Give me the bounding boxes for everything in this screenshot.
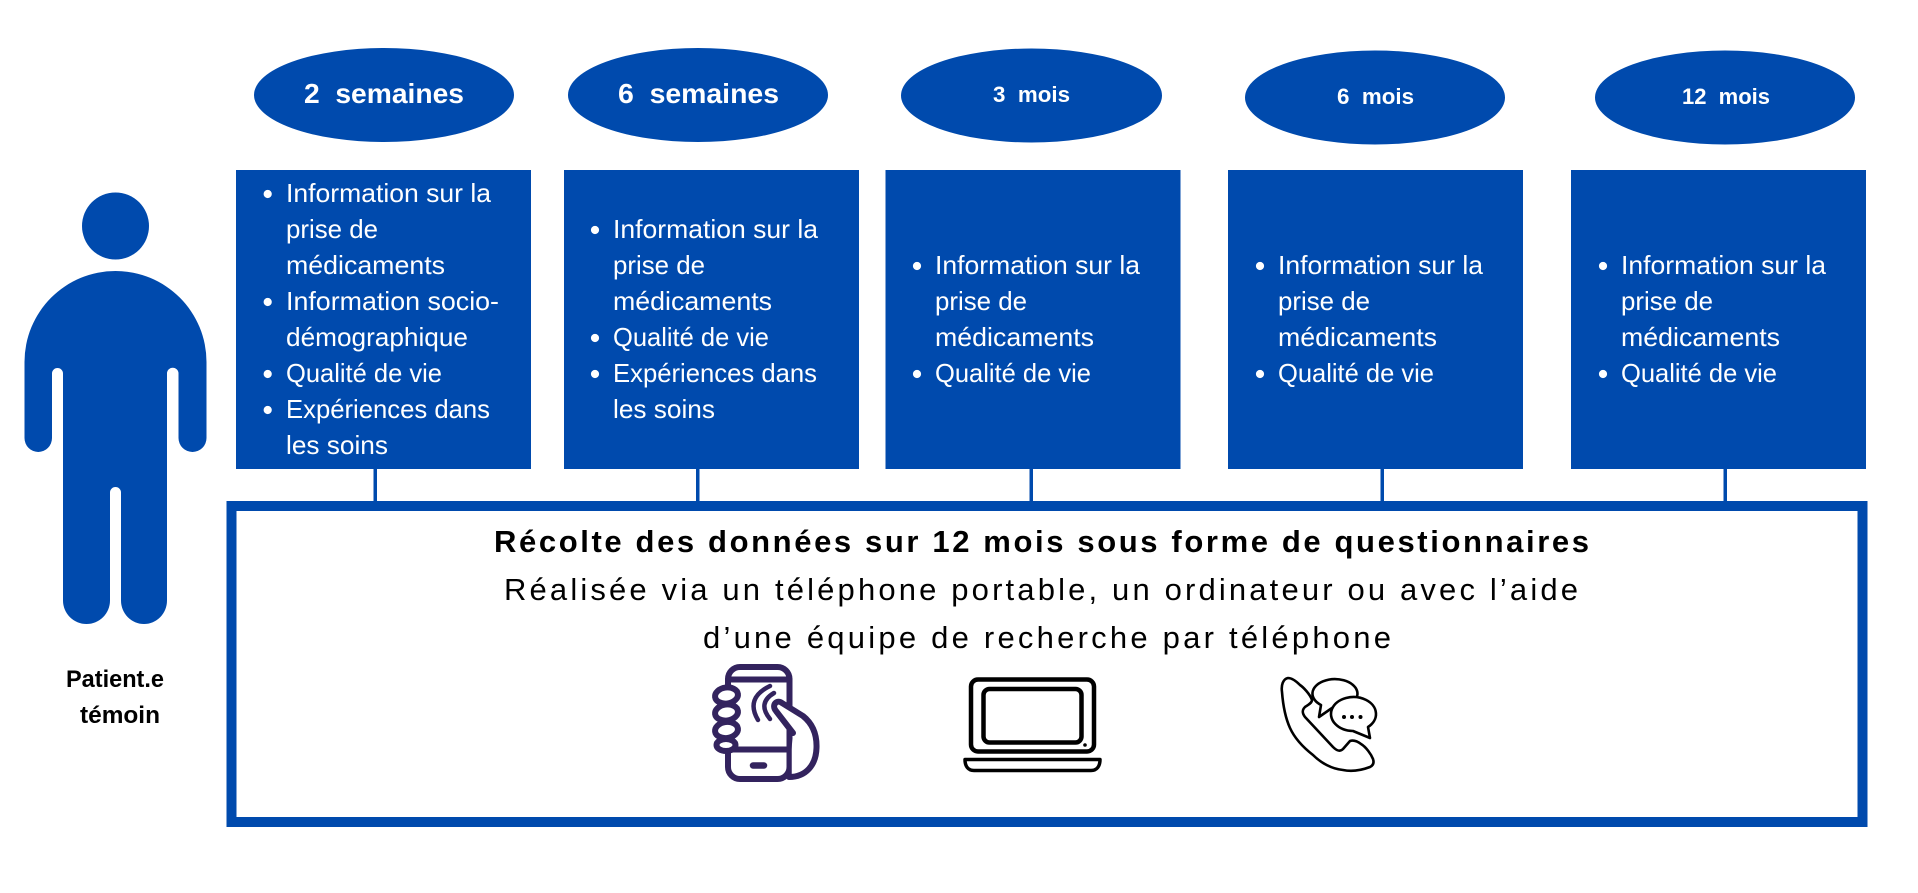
panel: contenu 6 semaines [564,170,859,469]
panel: contenu 3 mois: Qualité de vie [935,358,1091,388]
text: collection methods: d’une équipe de recherche par téléphone [703,620,1391,655]
panel: contenu 6 semaines: Qualité de vie [613,322,769,352]
label: patient: Patient.e [66,666,164,693]
panel: contenu 6 semaines: les soins [613,394,715,424]
panel: contenu 6 semaines: Information sur la [613,214,819,244]
connectors: panels to data collection frame [374,469,1727,502]
panel: data collection frame [232,506,1862,822]
panel: contenu 12 mois: médicaments [1621,322,1780,352]
icon: patient figure [24,192,206,624]
timepoint: 6 mois [1245,50,1505,144]
text: collection methods: Réalisée via un téléphone portable, un ordinateur ou avec l’aide [504,572,1578,607]
text: collection methods [504,572,1578,655]
panel: contenu 6 mois: prise de [1278,286,1370,316]
panel: contenu 12 mois: Qualité de vie [1621,358,1777,388]
timepoint: 12 mois [1595,50,1855,144]
panel: contenu 2 semaines: Expériences dans [286,394,490,424]
timepoint: 3 mois [901,48,1162,142]
timepoint: 12 mois: 12 mois [1682,84,1770,109]
panel: contenu 6 mois: Information sur la [1278,250,1484,280]
label: patient [66,666,164,729]
label: patient: témoin [80,702,160,729]
panel: contenu 6 semaines: Expériences dans [613,358,817,388]
panel: contenu 2 semaines: médicaments [286,250,445,280]
panel: contenu 3 mois: prise de [935,286,1027,316]
icon: smartphone in hand [714,667,817,779]
timepoint: 2 semaines: 2 semaines [304,78,464,109]
panel: contenu 2 semaines: démographique [286,322,468,352]
heading: data collection: Récolte des données sur 12 mois sous forme de questionnaires [494,524,1589,559]
panel: contenu 12 mois: prise de [1621,286,1713,316]
panel: contenu 6 semaines: médicaments [613,286,772,316]
timepoint: 6 semaines [568,48,828,142]
panel: contenu 2 semaines: Information socio- [286,286,499,316]
panel: contenu 3 mois: médicaments [935,322,1094,352]
panel: contenu 3 mois: Information sur la [935,250,1141,280]
panel: contenu 2 semaines [236,170,531,469]
panel: contenu 6 mois: médicaments [1278,322,1437,352]
icon: phone with speech bubbles [1282,678,1376,771]
panel: contenu 6 semaines: prise de [613,250,705,280]
timepoint: 2 semaines [254,48,514,142]
panel: contenu 2 semaines: prise de [286,214,378,244]
panel: contenu 6 mois: Qualité de vie [1278,358,1434,388]
panel: contenu 3 mois [886,170,1180,469]
panel: contenu 12 mois [1571,170,1866,469]
timepoint: 3 mois: 3 mois [993,82,1070,107]
panel: contenu 2 semaines: Qualité de vie [286,358,442,388]
panel: contenu 2 semaines: les soins [286,430,388,460]
panel: contenu 12 mois: Information sur la [1621,250,1827,280]
timepoint: 6 semaines: 6 semaines [618,78,779,109]
panel: contenu 2 semaines: Information sur la [286,178,492,208]
panel: contenu 6 mois [1228,170,1523,469]
icon: laptop [965,680,1100,770]
timepoint: 6 mois: 6 mois [1337,84,1414,109]
